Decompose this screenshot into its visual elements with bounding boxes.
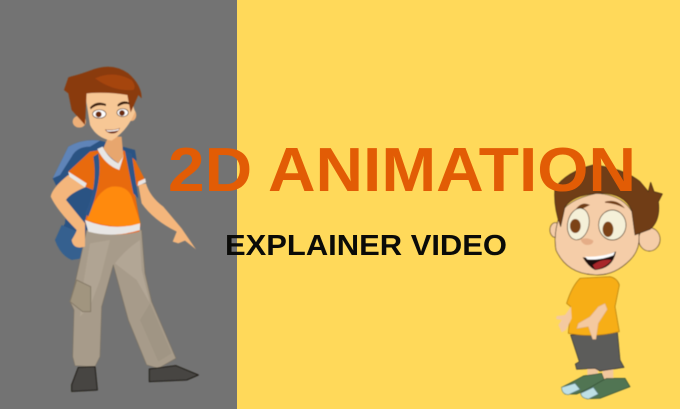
sneakers xyxy=(562,373,630,399)
arms xyxy=(51,175,196,249)
character: cartoon kid in yellow shirt xyxy=(550,165,662,399)
subtitle: EXPLAINER VIDEO: EXPLAINER VIDEO xyxy=(225,230,507,262)
character: teen boy with backpack xyxy=(51,67,198,391)
background: yellow panel xyxy=(237,0,680,409)
head xyxy=(550,165,662,275)
shoes xyxy=(72,366,198,391)
trousers xyxy=(70,230,176,368)
background: gray panel xyxy=(0,0,237,409)
legs xyxy=(587,368,613,380)
title: 2D ANIMATION: 2D ANIMATION xyxy=(168,136,636,205)
backpack xyxy=(53,140,137,260)
head xyxy=(64,67,142,163)
shirt and arms xyxy=(556,277,619,339)
t-shirt xyxy=(68,147,146,235)
shorts xyxy=(571,332,624,371)
